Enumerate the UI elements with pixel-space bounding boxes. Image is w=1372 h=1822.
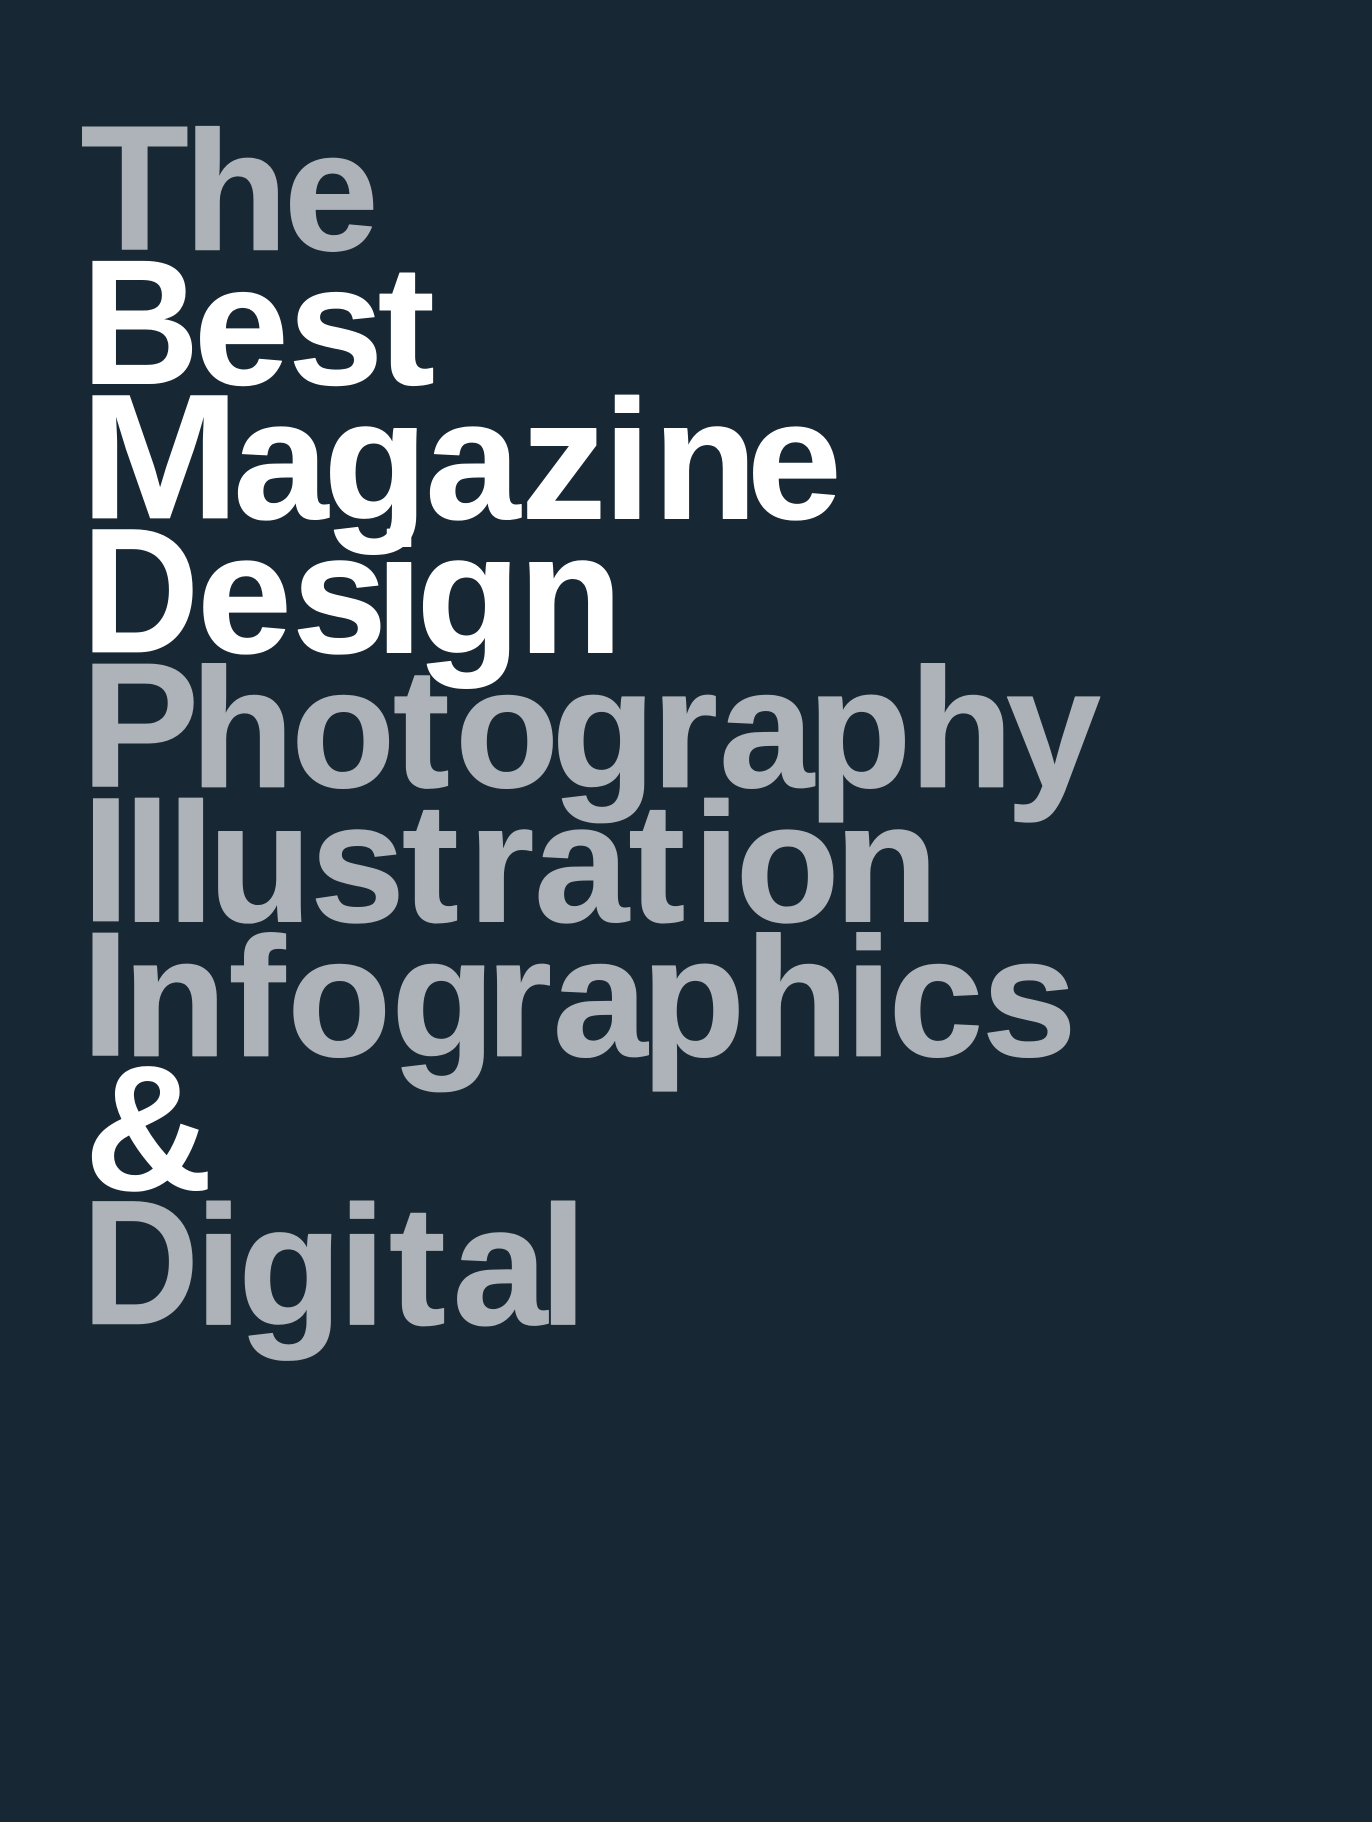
heading line: Digital: igital: [195, 1171, 587, 1361]
heading line: Infographics: nfographics: [123, 903, 1077, 1093]
heading line: Magazine: agazine: [234, 365, 842, 555]
heading line: Illustration: I: [81, 759, 131, 959]
heading line: ampersand: &: [84, 1028, 213, 1228]
heading line: Photography: P: [80, 625, 200, 825]
heading line: Best: B: [82, 222, 200, 422]
heading line: Design: esign: [197, 499, 622, 689]
heading line: Illustration: llustration: [124, 768, 938, 958]
heading line: Design: D: [82, 490, 200, 690]
heading line: Best: est: [194, 231, 435, 421]
heading line: Infographics: I: [80, 894, 130, 1094]
heading line: The: T: [80, 88, 189, 288]
heading line: Magazine: M: [80, 356, 240, 556]
heading line: Photography: hotography: [190, 634, 1101, 824]
heading line: The: he: [184, 97, 379, 287]
heading line: Digital: D: [82, 1162, 200, 1362]
